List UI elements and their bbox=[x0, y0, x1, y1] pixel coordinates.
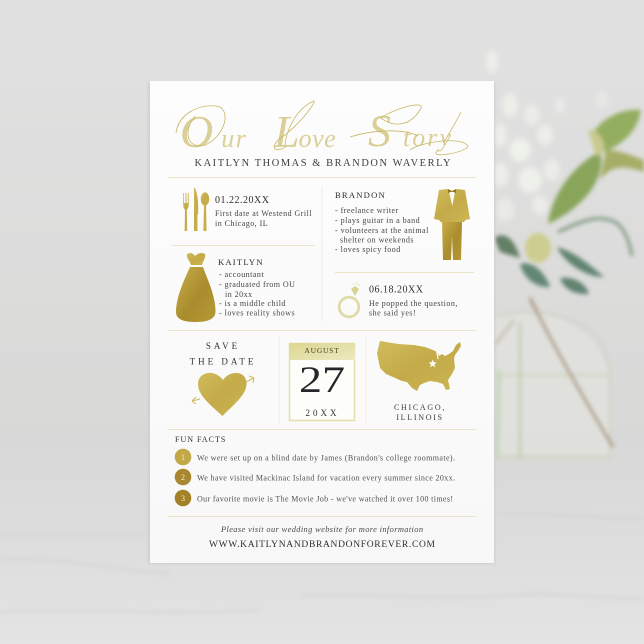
card shadow bbox=[148, 83, 495, 564]
fact 2: We have visited Mackinac Island for vacation every summer since 20xx. bbox=[197, 474, 455, 482]
background: flowers and vase bbox=[486, 50, 644, 460]
fact 1 bbox=[175, 449, 455, 465]
fact 2: 2 bbox=[181, 473, 185, 482]
facts: - volunteers at the animal bbox=[335, 226, 429, 235]
heading: SAVE bbox=[206, 341, 240, 351]
icon: ring bbox=[339, 282, 360, 317]
title: Our Love Story: O ur bbox=[180, 106, 247, 157]
description: she said yes! bbox=[369, 308, 416, 318]
facts: - freelance writer bbox=[335, 206, 399, 215]
facts: - loves reality shows bbox=[219, 308, 295, 318]
facts: shelter on weekends bbox=[340, 236, 414, 244]
year: 20XX bbox=[306, 408, 340, 418]
location label: ILLINOIS bbox=[396, 413, 444, 422]
name: KAITLYN bbox=[218, 257, 264, 267]
title: Our Love Story: Love bbox=[273, 106, 336, 157]
month header bbox=[289, 343, 355, 360]
panel: first date bbox=[183, 188, 312, 231]
description: He popped the question, bbox=[369, 299, 458, 308]
icon: dress bbox=[176, 253, 216, 322]
month: AUGUST bbox=[304, 346, 340, 355]
background: marble table bbox=[0, 430, 644, 644]
title: Our Love Story: S tory bbox=[368, 105, 453, 156]
icon: heart with arrow bbox=[192, 373, 254, 416]
facts: - accountant bbox=[219, 270, 264, 279]
date: 06.18.20XX bbox=[369, 284, 424, 296]
date: 01.22.20XX bbox=[215, 195, 270, 206]
url: WWW.KAITLYNANDBRANDONFOREVER.COM bbox=[209, 540, 436, 550]
facts: - is a middle child bbox=[219, 299, 286, 308]
fact 3: Our favorite movie is The Movie Job - we've watched it over 100 times! bbox=[197, 494, 453, 504]
panel: save the date bbox=[190, 341, 256, 416]
card panel bbox=[150, 81, 494, 563]
heading: THE DATE bbox=[190, 356, 256, 366]
background: wall bbox=[0, 0, 644, 434]
panel: engagement bbox=[339, 282, 458, 318]
fact 3 bbox=[175, 490, 453, 506]
invitation line: Please visit our wedding website for more information bbox=[220, 525, 423, 534]
footer: website bbox=[209, 525, 436, 550]
white blossoms bbox=[486, 50, 607, 222]
icon: tuxedo bbox=[434, 189, 470, 260]
icon: fork, knife and spoon bbox=[183, 188, 209, 231]
day: 27 bbox=[299, 360, 345, 401]
panel: Brandon bbox=[335, 189, 470, 260]
fact 1: 1 bbox=[181, 453, 185, 462]
panel: fun facts bbox=[175, 435, 455, 506]
facts: - graduated from OU bbox=[219, 280, 295, 289]
fact 3: 3 bbox=[181, 494, 185, 503]
description: in Chicago, IL bbox=[215, 219, 268, 228]
location label: CHICAGO, bbox=[394, 403, 446, 412]
icon: USA map bbox=[377, 341, 461, 391]
leaves, stems and vase bbox=[494, 110, 644, 460]
subtitle: names: KAITLYN THOMAS & BRANDON WAVERLY bbox=[194, 158, 451, 169]
panel: calendar bbox=[289, 343, 355, 420]
heading: FUN FACTS bbox=[175, 435, 226, 444]
fact 1: We were set up on a blind date by James (Brandon's college roommate). bbox=[197, 454, 455, 462]
name: BRANDON bbox=[335, 190, 386, 200]
facts: in 20xx bbox=[225, 290, 253, 299]
panel: location bbox=[377, 341, 461, 422]
fact 2 bbox=[175, 469, 455, 485]
title: Our Love Story bbox=[176, 101, 468, 157]
facts: - plays guitar in a band bbox=[335, 216, 420, 225]
panel: Kaitlyn bbox=[176, 253, 295, 322]
facts: - loves spicy food bbox=[335, 245, 401, 254]
description: First date at Westend Grill bbox=[215, 209, 312, 218]
